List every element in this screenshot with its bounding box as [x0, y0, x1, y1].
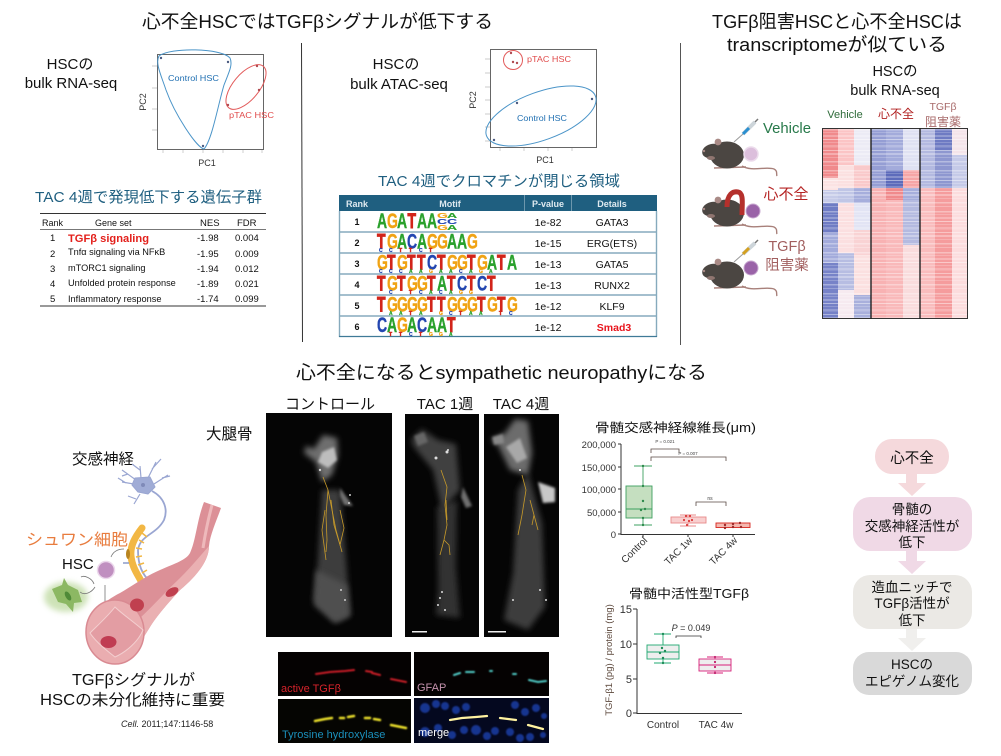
- image: GFAP: [414, 652, 549, 696]
- image: tyrosine hydroxylase: Tyrosine hydroxylase: [282, 729, 385, 741]
- table: gene sets: 0.012: [235, 264, 259, 275]
- heatmap column labels: TGFβ: [929, 101, 957, 113]
- motif logos: C C T T C T: [379, 248, 432, 254]
- axis labels: 10: [620, 639, 632, 651]
- axis labels: [582, 440, 616, 541]
- table: motifs: 3: [354, 259, 360, 269]
- title: left: 心不全HSCではTGFβシグナルが低下する: [142, 11, 493, 32]
- x-axis labels: TAC 1w: [663, 535, 696, 568]
- table: gene sets: -1.89: [197, 279, 219, 290]
- labels: imaging columns: コントロール: [285, 396, 375, 413]
- panel: flow diagram: [853, 439, 972, 695]
- axis labels: 0: [626, 708, 632, 720]
- flow step: epigenome change: [853, 652, 972, 695]
- flow step: niche TGFβ decline: 低下: [898, 613, 926, 628]
- label: TGFβ inhibitor: 阻害薬: [765, 257, 809, 274]
- icon: vehicle mouse: [701, 119, 777, 176]
- heatmap: [822, 128, 968, 319]
- flow step: sympathetic activity decline: 骨髄の: [892, 502, 932, 517]
- motif logos: C C C A A G A A C A G A: [379, 269, 493, 275]
- arrow: step 1 to 2: [898, 474, 926, 496]
- table: motifs: ERG(ETS): [587, 238, 637, 250]
- chart: ATAC-seq PCA: PC1: [536, 155, 554, 165]
- label: femur: 大腿骨: [206, 425, 253, 443]
- label: HSC bulk ATAC-seq: bulk ATAC-seq: [350, 76, 448, 93]
- label: HSC bulk RNA-seq: [25, 56, 117, 92]
- image: active TGFβ: active TGFβ: [281, 683, 341, 695]
- chart: ATAC-seq PCA: PC2: [468, 91, 478, 109]
- flow step: niche TGFβ decline: [853, 575, 972, 629]
- image: merge: merge: [418, 727, 449, 739]
- table: motifs: RUNX2: [594, 280, 630, 292]
- table: motifs: P-value: [532, 199, 564, 209]
- motif logos: C T C A C A G G: [389, 290, 473, 296]
- table: motifs: KLF9: [599, 301, 625, 313]
- flow step: epigenome change: HSCの: [891, 657, 933, 672]
- title: middle: 心不全になるとsympathetic neuropathyになる: [296, 362, 707, 383]
- image: control femur: [266, 413, 392, 637]
- table: gene sets: 0.099: [235, 294, 259, 305]
- label: heart failure: 心不全: [763, 186, 809, 203]
- title: right: TGFβ阻害HSCと心不全HSCは: [712, 11, 962, 32]
- labels: imaging columns: [285, 396, 549, 413]
- motif logos: T T C T G G A: [389, 332, 453, 338]
- table: gene sets: [40, 214, 266, 306]
- heatmap column labels: 心不全: [878, 107, 914, 121]
- label: TGFβ inhibitor: [765, 239, 809, 274]
- label: HSC bulk ATAC-seq: HSCの: [373, 56, 419, 73]
- table: gene sets: 0.021: [235, 279, 259, 290]
- table: motifs: 4: [354, 280, 360, 290]
- table: gene sets: Tnfα signaling via NFκB: [68, 247, 165, 257]
- table: gene sets: 2: [50, 249, 55, 260]
- chart: ATAC-seq PCA: Control HSC: [517, 113, 567, 123]
- title: right: transcriptomeが似ている: [727, 34, 947, 55]
- table: motifs: GATA5: [596, 259, 629, 271]
- axis labels: 15: [620, 604, 632, 616]
- x-axis labels: TAC 4w: [708, 535, 741, 568]
- image: GFAP: GFAP: [417, 682, 446, 694]
- label: Schwann cell: シュワン細胞: [26, 531, 128, 549]
- label: HSC bulk RNA-seq (right): HSCの: [872, 64, 918, 80]
- table: gene sets: 5: [50, 294, 55, 305]
- table: gene sets: 0.009: [235, 249, 259, 260]
- panel: RNA-seq: [25, 50, 274, 306]
- axes: [633, 609, 742, 714]
- icon: green stromal cell: [44, 578, 88, 612]
- panel: niche illustration: [26, 451, 225, 729]
- significance brackets: ns: [707, 496, 713, 502]
- label: HSC bulk RNA-seq (right): [850, 64, 940, 99]
- caption: TGFβ signal: HSCの未分化維持に重要: [40, 691, 225, 709]
- flow step: heart failure: [875, 439, 949, 474]
- image: TAC 4 week femur: [484, 414, 559, 637]
- table: gene sets: Inflammatory response: [68, 294, 161, 304]
- icon: HSC cell: [98, 562, 114, 578]
- table: gene sets: Unfolded protein response: [68, 278, 176, 288]
- panel: TGFβ inhibitor comparison: [701, 64, 968, 319]
- label: Vehicle: Vehicle: [763, 121, 811, 137]
- table: gene sets: -1.98: [197, 233, 219, 244]
- axis labels: 150,000: [582, 463, 616, 474]
- table: motifs: 1e-15: [535, 238, 562, 250]
- panel: femur imaging: [206, 396, 559, 637]
- y-axis title: TGF-β1 (pg) / protein (mg): [604, 604, 615, 716]
- axes: [618, 444, 755, 537]
- table: gene sets: 4: [50, 279, 55, 290]
- icon: neuron: [118, 459, 170, 582]
- label: HSC bulk RNA-seq: bulk RNA-seq: [25, 75, 117, 92]
- motif logos: GA: [437, 212, 457, 220]
- box: control: [647, 633, 679, 664]
- table: gene sets: -1.95: [197, 249, 219, 260]
- table: gene sets: TGFβ signaling: [68, 233, 149, 245]
- flow step: niche TGFβ decline: TGFβ活性が: [874, 596, 950, 611]
- x-axis labels: [647, 720, 734, 731]
- motif logos: CAGACAAT: [377, 313, 456, 337]
- axis labels: 0: [611, 530, 616, 541]
- table: motifs: 1e-13: [535, 259, 562, 271]
- table: motifs: 1e-12: [535, 301, 562, 313]
- label: sympathetic nerve: 交感神経: [72, 451, 134, 468]
- image: TAC 1 week femur: [405, 414, 479, 637]
- label: TGFβ inhibitor: TGFβ: [768, 239, 806, 255]
- chart: RNA-seq PCA: [138, 50, 274, 168]
- flow step: sympathetic activity decline: [853, 497, 972, 551]
- flow step: niche TGFβ decline: 造血ニッチで: [872, 580, 952, 595]
- table: motifs: Motif: [439, 199, 462, 209]
- table: motifs: 5: [354, 301, 360, 311]
- motif logos: [377, 209, 518, 338]
- motif logos: GTGTTCTGGTGATA: [377, 251, 517, 274]
- caption: TGFβ signal: [40, 671, 225, 709]
- heatmap column labels: 阻害薬: [925, 115, 961, 129]
- chart: RNA-seq PCA: PC2: [138, 93, 148, 111]
- table: gene sets: 0.004: [235, 233, 259, 244]
- table: gene sets: Gene set: [95, 218, 132, 228]
- motif logos: TGACAGGAAG: [377, 230, 478, 253]
- table: gene sets: 3: [50, 264, 55, 275]
- label: HSC bulk RNA-seq (right): bulk RNA-seq: [850, 83, 940, 99]
- x-axis labels: Control: [620, 535, 650, 566]
- labels: imaging columns: TAC 4週: [493, 396, 549, 413]
- flow step: sympathetic activity decline: 交感神経活性が: [865, 518, 960, 534]
- box: TAC 4w: [699, 656, 731, 674]
- image: tyrosine hydroxylase: [278, 699, 411, 743]
- significance brackets: P = 0.007: [678, 451, 698, 456]
- table: gene sets: FDR: [237, 218, 257, 229]
- image: active TGFβ: [278, 652, 411, 696]
- label: HSC bulk ATAC-seq: [350, 56, 448, 93]
- table: motifs: Details: [597, 199, 627, 209]
- title: right: [712, 11, 962, 55]
- motif logos: A A T A G C T A A T C: [389, 311, 513, 317]
- chart: RNA-seq PCA: pTAC HSC: [229, 110, 274, 120]
- heading: closed chromatin regions: TAC 4週でクロマチンが閉じる領域: [378, 173, 620, 190]
- panel: active TGFβ chart: [604, 586, 749, 731]
- significance bracket: [672, 623, 710, 638]
- motif logos: CC: [437, 218, 457, 226]
- icon: heart failure mouse: [701, 192, 777, 234]
- image: merge: [414, 698, 549, 743]
- table: gene sets: -1.94: [197, 264, 219, 275]
- axis labels: 200,000: [582, 440, 616, 451]
- table: motifs: 2: [354, 238, 360, 248]
- significance brackets: [651, 439, 726, 506]
- x-axis labels: Control: [647, 720, 679, 731]
- axis labels: 50,000: [587, 508, 616, 519]
- table: motifs: GATA3: [596, 217, 629, 229]
- panel: sympathetic fiber chart: [582, 420, 756, 568]
- citation: Cell. 2011;147:1146-58: [121, 719, 213, 729]
- heatmap column labels: Vehicle: [827, 109, 863, 121]
- box: control: [626, 465, 652, 526]
- table: gene sets: NES: [200, 218, 220, 229]
- axis labels: [620, 604, 632, 720]
- label: HSC bulk RNA-seq: HSCの: [47, 56, 93, 73]
- motif logos: TGGGGTTGGGTGTG: [377, 293, 518, 316]
- x-axis labels: TAC 4w: [699, 720, 734, 731]
- table: motifs: 1e-12: [535, 322, 562, 334]
- table: gene sets: 1: [50, 233, 55, 244]
- motif logos: GA: [437, 224, 457, 232]
- axis labels: 100,000: [582, 485, 616, 496]
- box: TAC 1w: [671, 515, 706, 526]
- chart: RNA-seq PCA: PC1: [198, 158, 216, 168]
- flow step: sympathetic activity decline: 低下: [898, 535, 926, 550]
- chart title: 骨髄中活性型TGFβ: [629, 586, 749, 601]
- table: gene sets: -1.74: [197, 294, 219, 305]
- arrow: step 3 to 4: [898, 629, 926, 651]
- arrows: HSC interactions: [80, 549, 124, 606]
- table: motifs: 1: [354, 217, 360, 227]
- table: motifs: 6: [354, 322, 360, 332]
- table: motifs: [339, 195, 657, 338]
- axis labels: 5: [626, 674, 632, 686]
- table: gene sets: mTORC1 signaling: [68, 263, 145, 273]
- table: motifs: Smad3: [597, 322, 631, 334]
- significance bracket: P = 0.049: [672, 623, 710, 633]
- labels: imaging columns: TAC 1週: [417, 396, 473, 413]
- chart: RNA-seq PCA: Control HSC: [168, 73, 219, 83]
- caption: TGFβ signal: TGFβシグナルが: [72, 671, 196, 689]
- x-axis labels: [620, 535, 741, 568]
- panel: fluorescence images: [278, 652, 549, 743]
- table: motifs: Rank: [346, 199, 369, 209]
- motif logos: TGTGGTATCTCT: [377, 272, 496, 295]
- heading: downregulated genes: TAC 4週で発現低下する遺伝子群: [35, 189, 262, 206]
- flow step: epigenome change: エピゲノム変化: [865, 674, 960, 689]
- arrow: step 2 to 3: [898, 551, 926, 574]
- heatmap column labels: [827, 101, 961, 129]
- panel: ATAC-seq: [339, 50, 657, 338]
- chart: ATAC-seq PCA: [468, 50, 604, 165]
- label: HSC: HSC: [62, 556, 94, 573]
- flow step: heart failure: 心不全: [890, 450, 934, 467]
- motif logos: AGATAA: [377, 209, 437, 233]
- icon: Schwann cell: [123, 528, 147, 581]
- table: gene sets: Rank: [42, 218, 64, 228]
- table: motifs: 1e-13: [535, 280, 562, 292]
- icon: blood vessel: [86, 502, 221, 664]
- chart: ATAC-seq PCA: pTAC HSC: [527, 54, 571, 64]
- significance brackets: P = 0.021: [655, 439, 675, 444]
- icon: TGFβ inhibitor mouse: [701, 240, 777, 296]
- box: TAC 4w: [716, 522, 750, 529]
- chart title: 骨髄交感神経線維長(μm): [595, 420, 756, 435]
- table: motifs: 1e-82: [535, 217, 562, 229]
